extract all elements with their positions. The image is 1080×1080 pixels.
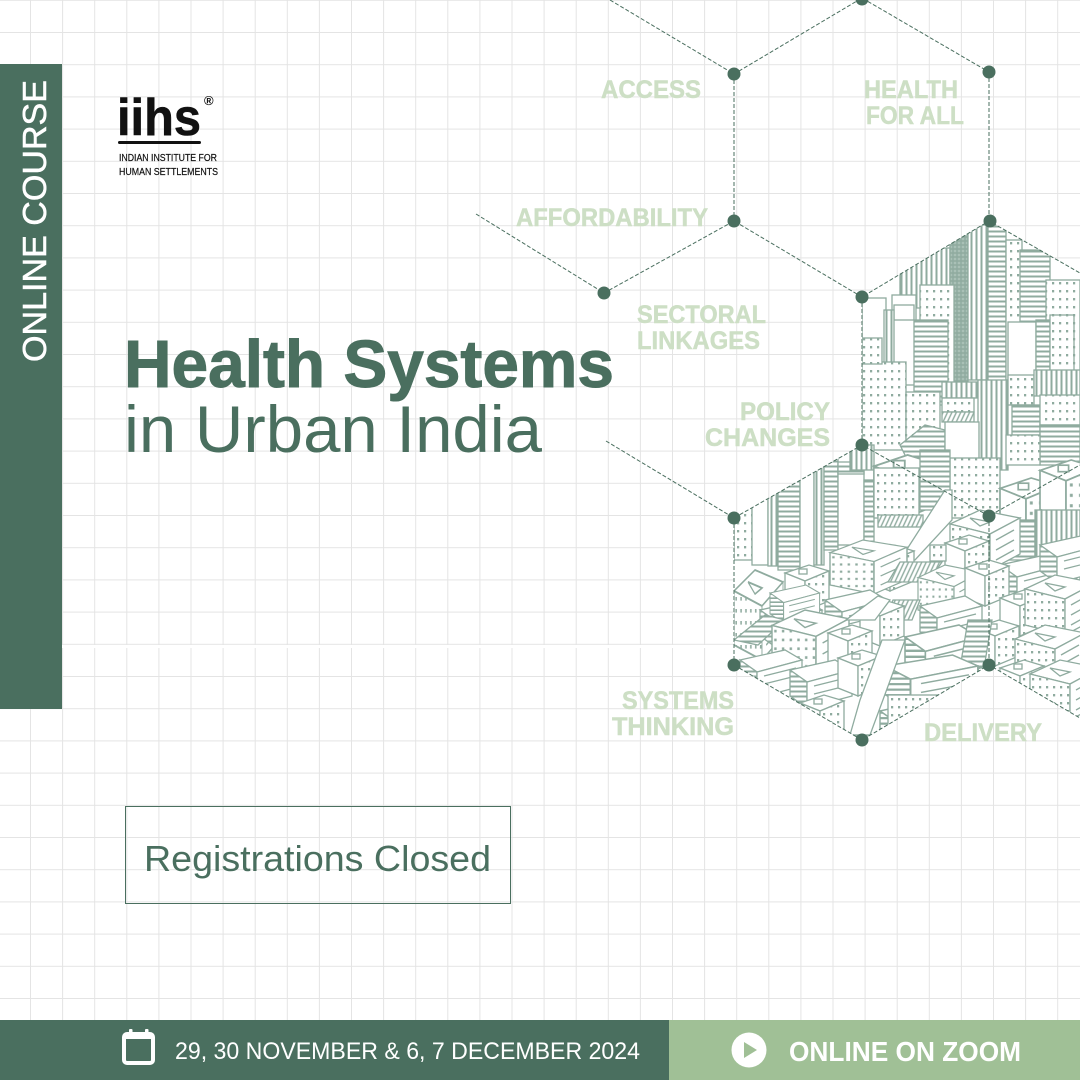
icon: play [732,1032,766,1068]
theme labels: LINKAGES [637,327,760,355]
footer bar: dates: 29, 30 NOVEMBER & 6, 7 DECEMBER 2024 [175,1038,640,1065]
title: in Urban India [124,392,542,466]
hexagon network: dashed lines [476,0,1080,740]
low-rise rooftops [734,510,1080,753]
logo: iihs: ® [204,93,214,108]
theme labels [516,76,1042,747]
theme labels: ACCESS [601,76,701,104]
title [124,327,614,466]
theme labels: CHANGES [705,424,830,452]
title: Health Systems [124,327,614,402]
theme labels: SYSTEMS [622,687,734,715]
side tab: online course: ONLINE COURSE [16,80,53,362]
illustration: city sketch in hexagons [730,215,1080,753]
footer bar: zoom: ONLINE ON ZOOM [789,1036,1021,1067]
footer bar: zoom [669,1020,1080,1080]
status box: registrations closed [126,806,510,904]
theme labels: SECTORAL [637,301,766,329]
theme labels: THINKING [612,713,734,741]
icon: calendar [124,1029,153,1063]
skyline: lower hexagon high-rises [734,445,1080,580]
skyline: upper hexagon towers [862,222,1080,470]
footer bar: dates [0,1020,670,1080]
theme labels: AFFORDABILITY [516,204,708,232]
theme labels: POLICY [740,398,830,426]
theme labels: DELIVERY [924,719,1042,747]
side tab: online course [0,64,62,709]
status box: registrations closed: Registrations Closed [144,838,491,879]
theme labels: FOR ALL [866,102,964,130]
logo: iihs: INDIAN INSTITUTE FOR [119,153,217,164]
logo: iihs [117,89,218,178]
logo: iihs: iihs [117,89,201,147]
theme labels: HEALTH [864,76,958,104]
hexagon network: node dots [598,0,996,746]
logo: iihs: HUMAN SETTLEMENTS [119,167,218,178]
